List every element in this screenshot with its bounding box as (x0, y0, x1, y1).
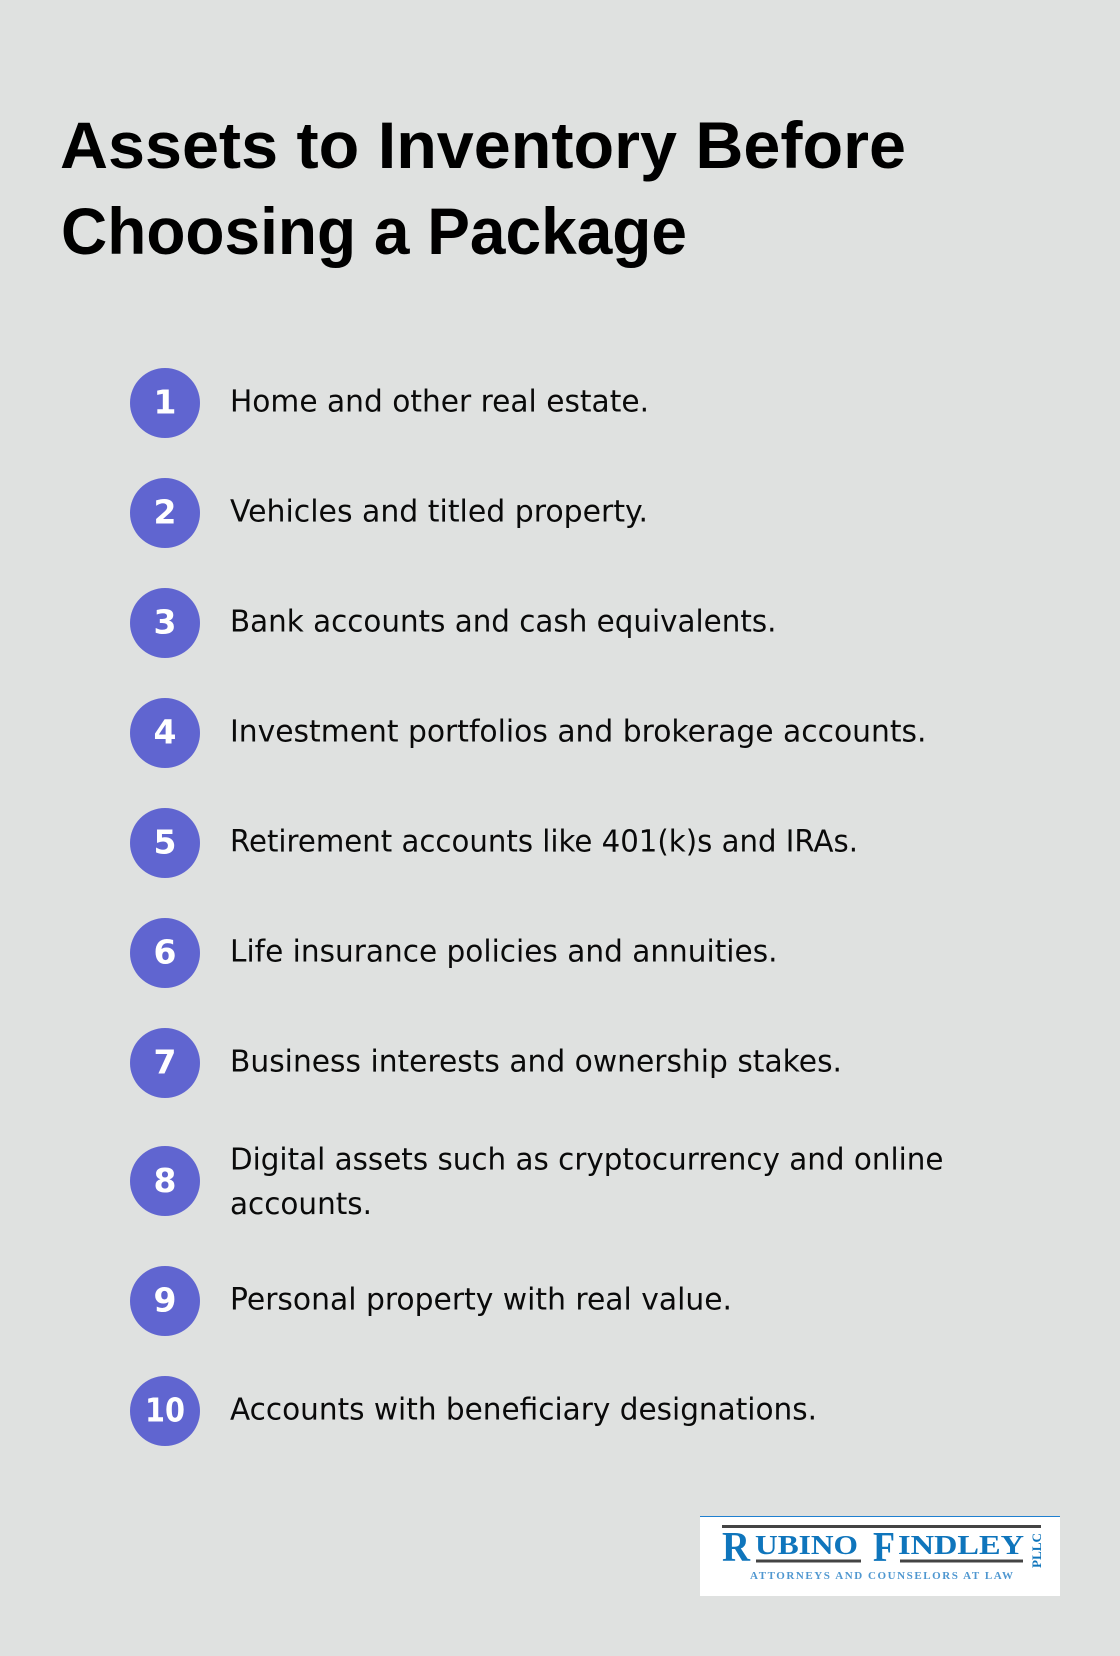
item 10 (130, 1376, 817, 1446)
item 10: 10 (145, 1390, 185, 1430)
item 4: Investment portfolios and brokerage accounts. (230, 714, 926, 750)
item 8: Digital assets such as cryptocurrency and online (230, 1142, 944, 1178)
item 6 (130, 918, 778, 988)
numbered list of assets (130, 368, 944, 1446)
title (60, 108, 906, 268)
item 3 (130, 588, 776, 658)
logo: Rubino Findley PLLC: UBINO (755, 1530, 858, 1560)
item 9: Personal property with real value. (230, 1282, 732, 1318)
item 10: Accounts with beneficiary designations. (230, 1392, 817, 1428)
title: Choosing a Package (61, 194, 687, 268)
item 4 (130, 698, 926, 768)
logo: Rubino Findley PLLC: F (873, 1525, 895, 1571)
item 3: 3 (154, 602, 176, 642)
item 2 (130, 478, 648, 548)
title: Assets to Inventory Before (60, 108, 906, 182)
item 7: 7 (154, 1042, 176, 1082)
item 5 (130, 808, 858, 878)
logo: Rubino Findley PLLC: PLLC (1029, 1533, 1044, 1568)
item 6: 6 (154, 932, 176, 972)
item 8: accounts. (230, 1187, 372, 1222)
item 1 (130, 368, 649, 438)
logo: Rubino Findley PLLC (700, 1516, 1060, 1596)
logo: Rubino Findley PLLC: INDLEY (898, 1530, 1024, 1560)
item 5: 5 (154, 822, 176, 862)
item 7: Business interests and ownership stakes. (230, 1044, 842, 1080)
logo: Rubino Findley PLLC: ATTORNEYS AND COUNSELORS AT LAW (750, 1570, 1013, 1582)
item 1: 1 (154, 382, 176, 422)
item 9 (130, 1266, 732, 1336)
item 5: Retirement accounts like 401(k)s and IRAs. (230, 824, 858, 860)
item 8: 8 (154, 1161, 176, 1200)
item 9: 9 (154, 1280, 176, 1320)
item 4: 4 (154, 712, 176, 752)
item 1: Home and other real estate. (230, 384, 649, 420)
item 7 (130, 1028, 842, 1098)
item 2: 2 (154, 492, 176, 532)
item 6: Life insurance policies and annuities. (230, 934, 778, 970)
item 2: Vehicles and titled property. (230, 494, 648, 530)
logo: Rubino Findley PLLC: R (722, 1525, 751, 1571)
item 3: Bank accounts and cash equivalents. (230, 604, 776, 640)
item 8 (130, 1142, 944, 1222)
